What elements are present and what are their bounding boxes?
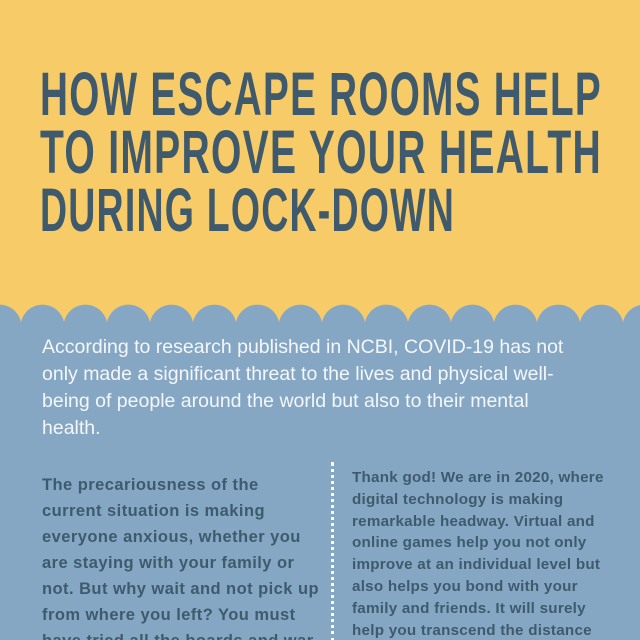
left column text: from where you left? You must: [42, 606, 296, 624]
header background with scallops: [0, 0, 640, 322]
right column text: online games help you not only: [352, 534, 586, 551]
title: [40, 60, 602, 244]
left column text: are staying with your family or: [42, 554, 294, 572]
left column text: [42, 476, 319, 640]
dotted divider: [331, 462, 334, 640]
right column text: also helps you bond with your: [352, 578, 578, 595]
intro text: being of people around the world but also to their mental: [42, 390, 529, 412]
intro text: According to research published in NCBI, COVID-19 has not: [42, 336, 563, 358]
right column text: digital technology is making: [352, 491, 563, 508]
intro text: health.: [42, 417, 101, 439]
right column text: improve at an individual level but: [352, 556, 600, 573]
left column text: The precariousness of the: [42, 476, 259, 494]
right column text: Thank god! We are in 2020, where: [352, 469, 604, 486]
left column text: not. But why wait and not pick up: [42, 580, 319, 598]
left column text: everyone anxious, whether you: [42, 528, 301, 546]
right column text: [352, 469, 604, 639]
right column text: remarkable headway. Virtual and: [352, 513, 595, 530]
right column text: help you transcend the distance: [352, 622, 592, 639]
intro text: [42, 336, 564, 439]
left column text: current situation is making: [42, 502, 265, 520]
intro text: only made a significant threat to the lives and physical well-: [42, 363, 554, 385]
right column text: family and friends. It will surely: [352, 600, 586, 617]
